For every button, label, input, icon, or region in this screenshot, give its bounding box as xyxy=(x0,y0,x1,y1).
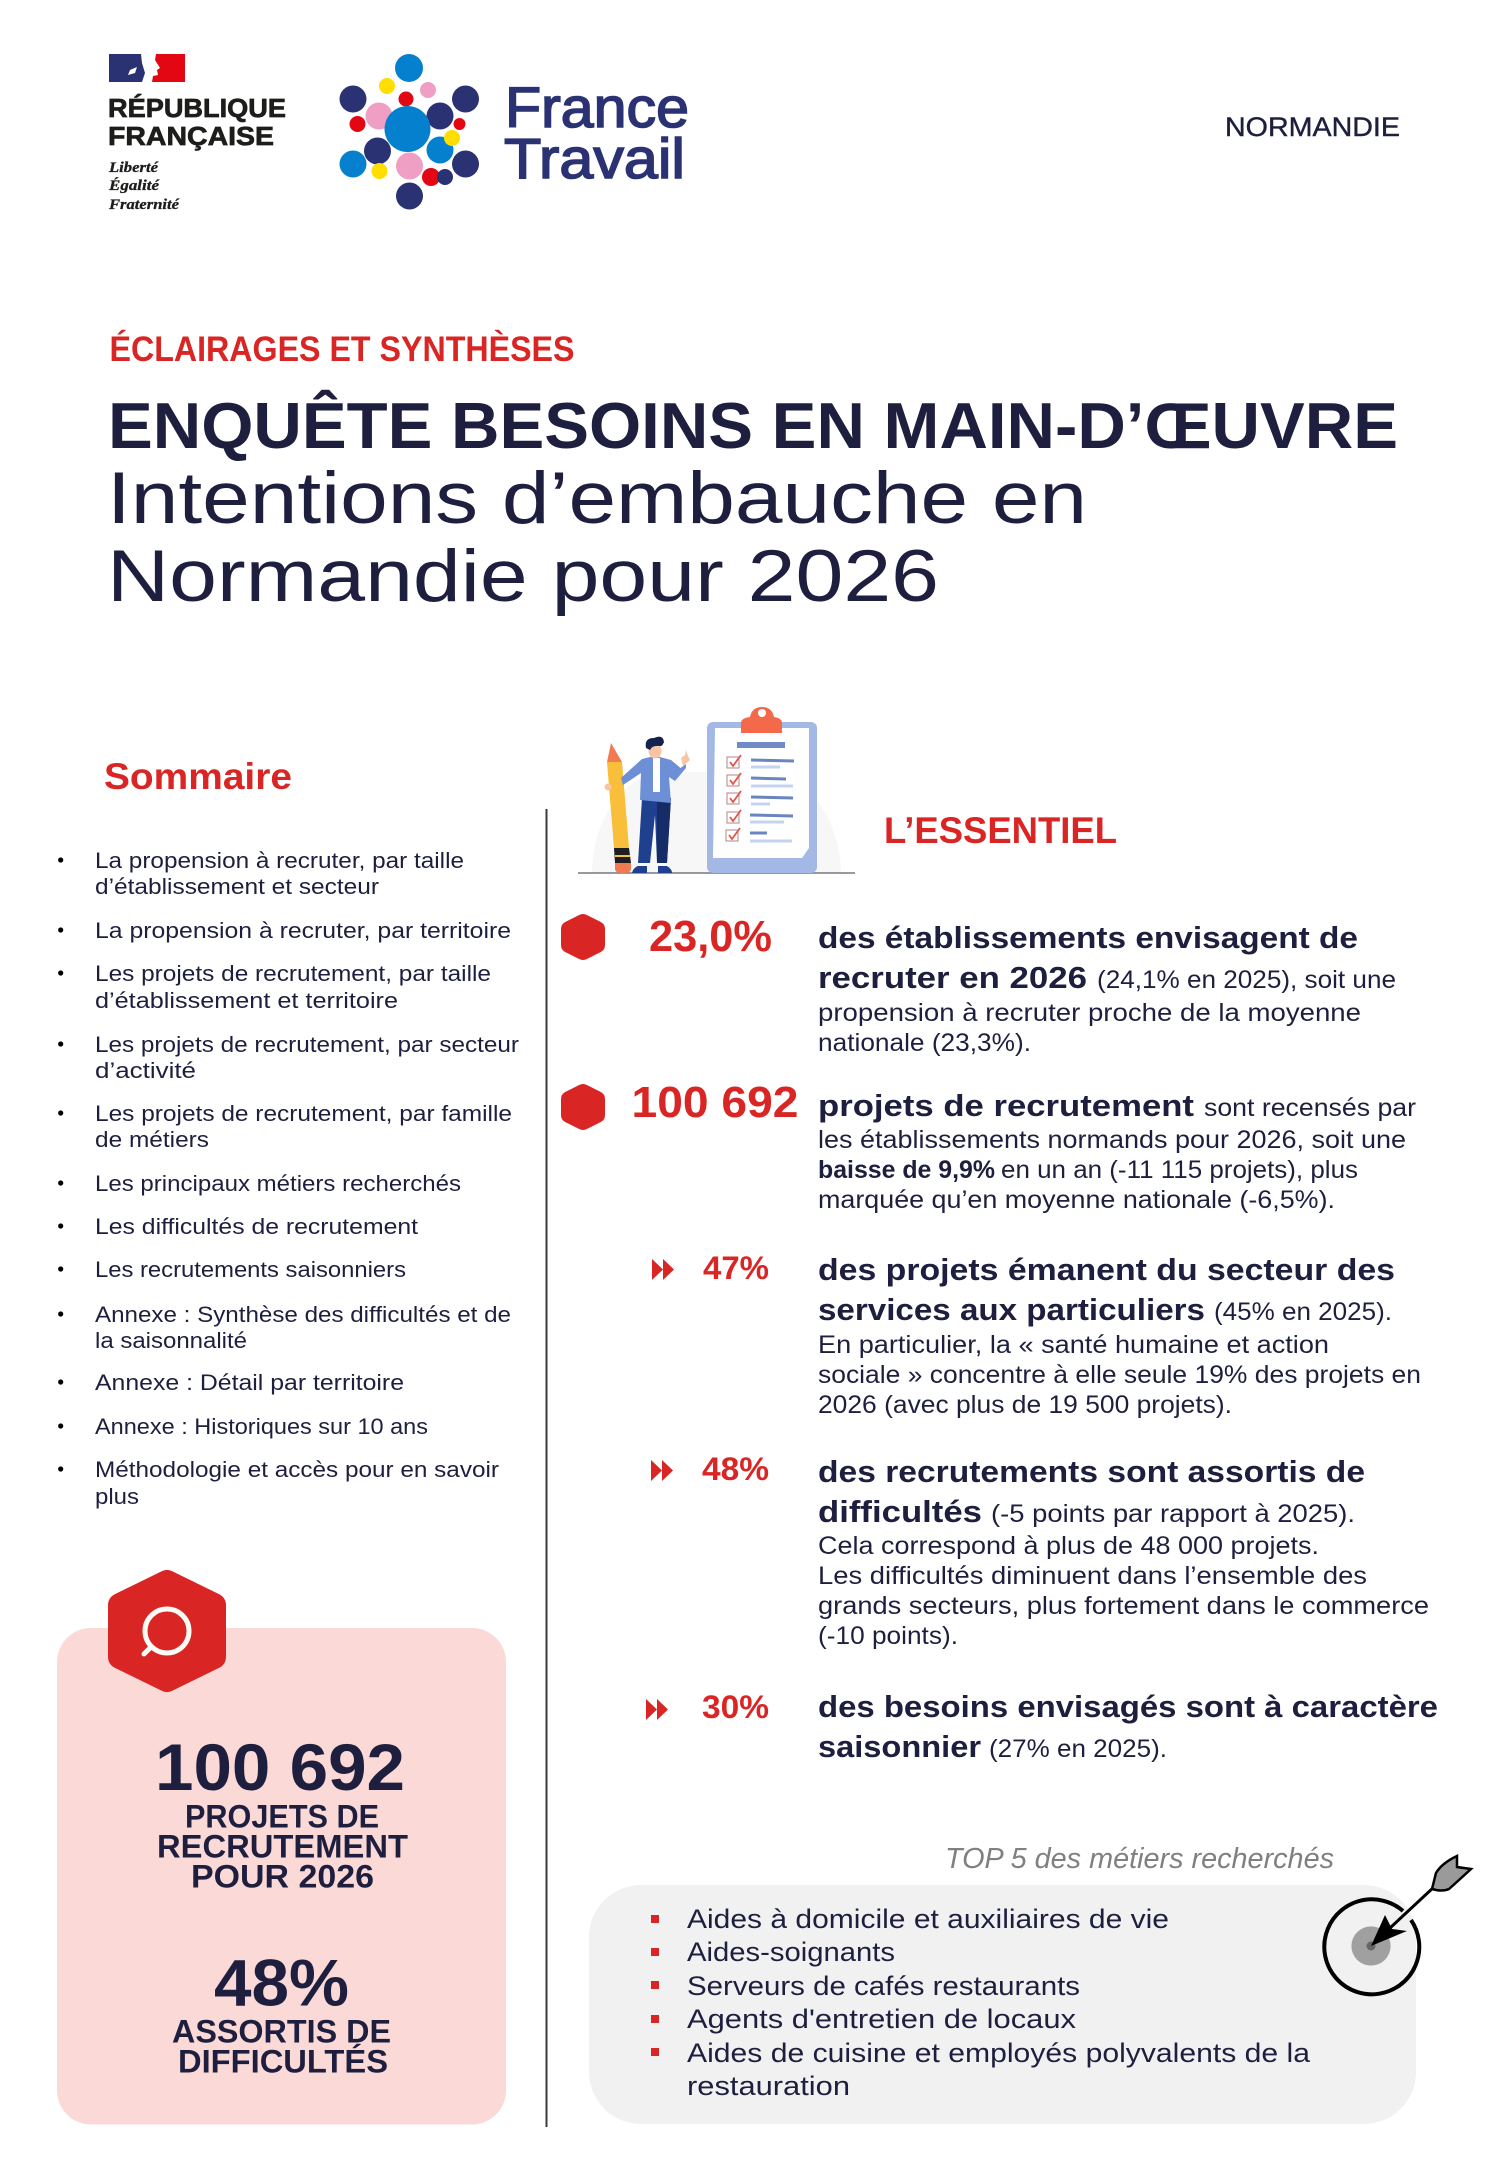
heading: Sommaire: Sommaire xyxy=(104,756,292,797)
heading: Éclairages et synthèses: ÉCLAIRAGES ET SYNTHÈSES xyxy=(110,329,574,369)
text block: services aux particuliers xyxy=(818,1252,1421,1419)
panel: chiffres clés: 48% xyxy=(214,1946,349,2020)
list: sommaire: Les recrutements saisonniers xyxy=(95,1257,406,1282)
key figure: 30%: 30% xyxy=(702,1689,769,1725)
logo: France Travail wordmark: France xyxy=(505,76,689,140)
key figure: 100 692: 100 692 xyxy=(632,1078,798,1127)
key figure: 100 692 xyxy=(569,1078,798,1127)
panel: chiffres clés: 100 692 xyxy=(155,1730,405,1804)
logo: France Travail wordmark xyxy=(504,76,689,191)
list: sommaire: Les projets de recrutement, par famille xyxy=(95,1101,512,1126)
list: sommaire: Les projets de recrutement, par taille xyxy=(95,961,491,986)
panel: chiffres clés: DIFFICULTÉS xyxy=(178,2044,388,2080)
text block: saisonnier: (27% en 2025). xyxy=(989,1735,1167,1763)
text block: services aux particuliers: des projets émanent du secteur des xyxy=(818,1252,1395,1287)
text block: difficultés: (-10 points). xyxy=(818,1622,958,1650)
title: Normandie pour 2026 xyxy=(107,536,939,617)
list: sommaire: d’établissement et secteur xyxy=(95,874,379,899)
logo: République Française: Fraternité xyxy=(108,197,180,213)
text block: difficultés: difficultés xyxy=(818,1494,982,1529)
illustration: man with pencil and checklist xyxy=(578,707,855,873)
logo: République Française xyxy=(108,54,286,213)
list: sommaire: La propension à recruter, par taille xyxy=(95,848,464,873)
list: sommaire: Annexe : Détail par territoire xyxy=(95,1370,404,1395)
key figure: 23,0% xyxy=(569,912,772,961)
text block: services aux particuliers: 2026 (avec plus de 19 500 projets). xyxy=(818,1391,1232,1419)
panel: chiffres clés xyxy=(57,1582,506,2124)
panel: chiffres clés: POUR 2026 xyxy=(191,1858,374,1894)
list: sommaire xyxy=(58,848,519,1509)
text block: établissements: propension à recruter proche de la moyenne xyxy=(818,999,1361,1027)
text block: services aux particuliers: (45% en 2025). xyxy=(1214,1298,1392,1326)
key figure: 23,0%: 23,0% xyxy=(649,912,772,961)
text block: services aux particuliers: services aux particuliers xyxy=(818,1292,1205,1327)
heading: top 5 métiers: TOP 5 des métiers recherchés xyxy=(945,1843,1334,1875)
title: ENQUÊTE BESOINS EN MAIN-D’ŒUVRE xyxy=(108,389,1398,462)
text block: établissements: recruter en 2026 xyxy=(818,960,1087,995)
icon: magnifier badge xyxy=(120,1582,214,1680)
logo: République Française: Liberté xyxy=(108,160,159,176)
panel: top 5 métiers xyxy=(589,1885,1416,2124)
list: sommaire: la saisonnalité xyxy=(95,1328,247,1353)
key figure: 47%: 47% xyxy=(703,1250,769,1286)
text block: établissements xyxy=(818,920,1396,1057)
panel: top 5 métiers: Serveurs de cafés restaurants xyxy=(687,1971,1080,2001)
text block: difficultés: grands secteurs, plus fortement dans le commerce xyxy=(818,1592,1429,1620)
text block: projets de recrutement: sont recensés par xyxy=(1204,1094,1416,1122)
icon: Marianne flag xyxy=(109,54,185,82)
title: Intentions d’embauche en xyxy=(107,458,1087,539)
text block: difficultés xyxy=(818,1454,1429,1650)
title xyxy=(107,389,1398,617)
text block: difficultés: Les difficultés diminuent dans l’ensemble des xyxy=(818,1562,1367,1590)
text block: projets de recrutement: les établissements normands pour 2026, soit une xyxy=(818,1126,1406,1154)
text block: difficultés: Cela correspond à plus de 48 000 projets. xyxy=(818,1532,1319,1560)
text block: saisonnier: des besoins envisagés sont à caractère xyxy=(818,1689,1438,1724)
icon: clipboard xyxy=(707,707,817,873)
logo: République Française: RÉPUBLIQUE xyxy=(108,93,286,123)
text block: projets de recrutement: marquée qu’en moyenne nationale (-6,5%). xyxy=(818,1186,1335,1214)
list: sommaire: Les difficultés de recrutement xyxy=(95,1214,418,1239)
logo: République Française: Égalité xyxy=(108,177,161,194)
panel: top 5 métiers: Aides à domicile et auxiliaires de vie xyxy=(687,1904,1169,1934)
list: sommaire: d’établissement et territoire xyxy=(95,988,398,1013)
list: sommaire: d’activité xyxy=(95,1058,196,1083)
icon: pencil xyxy=(607,743,631,873)
panel: top 5 métiers: Aides de cuisine et employés polyvalents de la xyxy=(687,2038,1311,2068)
heading: L'essentiel: L’ESSENTIEL xyxy=(884,810,1117,851)
text block: saisonnier xyxy=(818,1689,1438,1764)
key figure: 48%: 48% xyxy=(702,1451,769,1487)
text block: projets de recrutement: projets de recrutement xyxy=(818,1088,1194,1123)
text block: difficultés: (-5 points par rapport à 2025). xyxy=(991,1500,1355,1528)
icon: man xyxy=(604,737,690,873)
region label: Normandie: NORMANDIE xyxy=(1225,112,1400,142)
text block: services aux particuliers: En particulier, la « santé humaine et action xyxy=(818,1331,1329,1359)
logo: République Française: FRANÇAISE xyxy=(108,121,274,151)
text block: projets de recrutement: baisse de 9,9% xyxy=(818,1156,995,1184)
text block: saisonnier: saisonnier xyxy=(818,1729,981,1764)
text block: établissements: des établissements envisagent de xyxy=(818,920,1358,955)
list: sommaire: La propension à recruter, par territoire xyxy=(95,918,511,943)
panel: top 5 métiers: Agents d'entretien de locaux xyxy=(687,2004,1077,2034)
text block: projets de recrutement xyxy=(818,1088,1416,1214)
icon: target and arrow xyxy=(1324,1856,1471,1994)
list: sommaire: de métiers xyxy=(95,1127,209,1152)
list: sommaire: Les principaux métiers recherchés xyxy=(95,1171,461,1196)
logo: France Travail dots xyxy=(340,54,479,210)
text block: services aux particuliers: sociale » concentre à elle seule 19% des projets en xyxy=(818,1361,1421,1389)
list: sommaire: plus xyxy=(95,1484,139,1509)
logo: France Travail wordmark: Travail xyxy=(504,127,685,191)
list: sommaire: Annexe : Historiques sur 10 ans xyxy=(95,1414,428,1439)
text block: établissements: nationale (23,3%). xyxy=(818,1029,1031,1057)
panel: chiffres clés: PROJETS DE xyxy=(185,1798,379,1834)
list: sommaire: Annexe : Synthèse des difficultés et de xyxy=(95,1302,511,1327)
key figure: 48% xyxy=(651,1451,769,1487)
text block: établissements: (24,1% en 2025), soit une xyxy=(1097,966,1396,994)
list: sommaire: Méthodologie et accès pour en savoir xyxy=(95,1457,499,1482)
key figure: 47% xyxy=(652,1250,769,1286)
panel: top 5 métiers: Aides-soignants xyxy=(687,1937,895,1967)
text block: projets de recrutement: en un an (-11 115 projets), plus xyxy=(1001,1156,1358,1184)
panel: chiffres clés: RECRUTEMENT xyxy=(157,1828,408,1864)
list: sommaire: Les projets de recrutement, par secteur xyxy=(95,1032,519,1057)
text block: difficultés: des recrutements sont assortis de xyxy=(818,1454,1365,1489)
panel: top 5 métiers: restauration xyxy=(687,2071,850,2101)
panel: chiffres clés: ASSORTIS DE xyxy=(172,2014,391,2050)
key figure: 30% xyxy=(646,1689,769,1725)
